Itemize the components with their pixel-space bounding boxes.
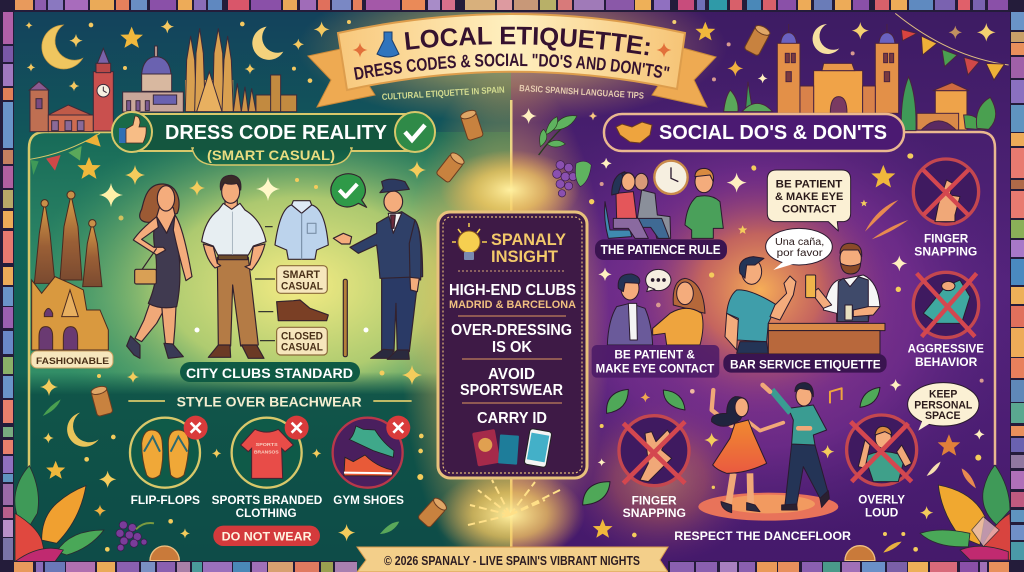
figure: man in smart casual: [202, 175, 266, 358]
bottom tiles: [14, 562, 1009, 572]
sprig: [539, 116, 577, 155]
banner: dress code reality: [112, 112, 435, 165]
prohibition: finger snapping bottom: SNAPPING: [623, 506, 686, 520]
label: be patient and make eye contact: [592, 345, 719, 378]
heading: SOCIAL DO'S & DON'TS: [659, 121, 887, 144]
connector ticks: [255, 227, 275, 341]
heading: DRESS CODE REALITY: [165, 121, 387, 144]
decorative stars: dress code panel: [40, 157, 426, 396]
item: sports branded clothing: [212, 416, 323, 520]
icon: check: [395, 112, 435, 152]
item: sports branded clothing: SPORTS: [256, 442, 278, 448]
label: smart casual: SMART: [283, 269, 320, 281]
pill: [115, 114, 433, 151]
grapes: [553, 161, 591, 197]
copper ball: [150, 546, 179, 561]
scene: bar service: [725, 170, 885, 354]
stanchion: [343, 279, 347, 357]
dancer: man: [763, 383, 829, 510]
icon: passport: [472, 429, 501, 466]
panel: dress code: [14, 110, 570, 560]
bunting: [895, 13, 1009, 80]
corner leaves: [15, 466, 104, 562]
icon: light bulb: [452, 223, 487, 260]
stars and sparks: center scene: [589, 153, 913, 307]
label: be patient and make eye contact: BE PATIENT &: [614, 347, 695, 361]
section heading: STYLE OVER BEACHWEAR: [177, 394, 362, 410]
left tiles: [3, 12, 13, 560]
insight: over-dressing: IS OK: [492, 339, 532, 356]
icon: phone: [524, 428, 552, 468]
pill: [604, 114, 904, 151]
insight: over-dressing: OVER-DRESSING: [451, 322, 572, 339]
section: style over beachwear: [15, 394, 424, 562]
insight: high-end clubs: [449, 271, 576, 316]
insight: over-dressing: [451, 322, 572, 359]
sprig and grapes: [539, 116, 591, 197]
insight heading: SPANALY: [491, 230, 567, 249]
banner ribbon tails: [308, 48, 716, 107]
figures: dress code: [127, 174, 423, 359]
insight: high-end clubs: MADRID & BARCELONA: [449, 299, 576, 311]
subtitle left: CULTURAL ETIQUETTE IN SPAIN: [382, 85, 505, 102]
prohibition: finger snapping top: [913, 159, 979, 259]
social figures: lower: [583, 379, 1012, 561]
insight: avoid sportswear: SPORTSWEAR: [460, 382, 563, 399]
bubble: be patient: [767, 170, 851, 231]
label: fashionable: [31, 351, 113, 368]
figure: doorman: [333, 179, 423, 359]
bubble: keep personal space: [908, 383, 979, 431]
landmark: brick church: [29, 82, 93, 132]
figure: woman in dress: [127, 184, 192, 358]
insight: high-end clubs: HIGH-END CLUBS: [449, 282, 576, 299]
label: respect the dancefloor: RESPECT THE DANCEFLOOR: [674, 529, 851, 543]
prohibition: finger snapping bottom: [619, 416, 689, 520]
box frame: [438, 212, 587, 478]
item: sports branded clothing: BRANSOS: [254, 449, 279, 455]
corner leaves: [920, 465, 1012, 560]
item: flip-flops: FLIP-FLOPS: [131, 493, 200, 507]
tab: smart casual: [192, 147, 352, 165]
footer ribbon: [357, 547, 668, 572]
label: bar service etiquette: BAR SERVICE ETIQUETTE: [730, 357, 881, 371]
tab: smart casual: (SMART CASUAL): [207, 147, 335, 163]
prohibition: overly loud: OVERLY: [858, 492, 905, 506]
title banner: [307, 13, 717, 108]
label: closed casual: CLOSED: [281, 330, 323, 342]
landmark: fortified tower: [256, 75, 297, 112]
grapes: [116, 521, 154, 551]
label: be patient and make eye contact: MAKE EYE CONTACT: [596, 362, 715, 376]
scene: be patient couple: [607, 269, 705, 345]
label: city clubs standard: [180, 362, 360, 382]
icon: thumbs up: [112, 112, 152, 152]
icon: blue dress: [377, 32, 399, 57]
item: sports branded clothing: SPORTS BRANDED: [212, 493, 323, 507]
bubble: be patient: BE PATIENT: [776, 178, 842, 190]
label: closed casual: CASUAL: [281, 342, 323, 354]
bunting: left panel: [30, 133, 101, 175]
title line 2: DRESS CODES & SOCIAL "DO'S AND DON'TS": [354, 54, 670, 80]
item: flip-flops: [130, 416, 208, 507]
bubble: una cana: por favor: [777, 248, 823, 259]
floor ellipse: [698, 493, 838, 521]
prohibition: finger snapping top: FINGER: [924, 232, 969, 246]
bubble: keep personal space: KEEP: [929, 388, 957, 400]
tag: do not wear: DO NOT WEAR: [222, 530, 312, 544]
leaves: [583, 387, 880, 505]
item: gym shoes: GYM SHOES: [333, 493, 404, 507]
counter: [768, 323, 885, 354]
prohibition: finger snapping bottom: FINGER: [632, 493, 677, 507]
decorative moons and stars: right top: [521, 20, 996, 170]
bubble: keep personal space: PERSONAL: [914, 399, 973, 411]
scene: the patience rule: [605, 161, 723, 238]
social figures: upper: [589, 153, 984, 378]
prohibition: aggressive behavior: BEHAVIOR: [915, 355, 978, 369]
landmark: domed building: [123, 46, 183, 112]
footer ribbon: © 2026 SPANALY - LIVE SPAIN'S VIBRANT NIGHTS: [384, 554, 640, 568]
item: gym shoes: [333, 416, 410, 507]
panel: social: [500, 80, 1020, 565]
skyline: left: [29, 28, 297, 132]
prohibition: overly loud: LOUD: [865, 506, 899, 520]
tag: do not wear: [213, 526, 320, 546]
center burst glow: [400, 65, 610, 572]
decorative moons and stars: left top: [25, 20, 351, 91]
banner body: [338, 14, 685, 90]
bubble: una cana: [766, 228, 832, 270]
label: city clubs standard: CITY CLUBS STANDARD: [186, 366, 353, 381]
icon: check bubble: [331, 174, 367, 207]
icon: music note: [830, 388, 842, 403]
skyline: right: [724, 13, 1009, 131]
landmark: Sagrada Familia: [185, 28, 256, 112]
bubble: keep personal space: SPACE: [925, 410, 961, 422]
prohibition: aggressive behavior: [908, 272, 984, 369]
stars and petals: lower right: [593, 379, 985, 553]
insight: carry id: CARRY ID: [477, 410, 547, 427]
banner star right: [656, 42, 672, 58]
cathedral: left illustration: [32, 191, 108, 350]
right tiles: [1011, 12, 1024, 560]
label: smart casual: CASUAL: [281, 280, 323, 292]
label: the patience rule: THE PATIENCE RULE: [601, 243, 721, 257]
landmark: cypress and villa: [901, 77, 969, 131]
landmark: twin tower cathedral: [777, 24, 899, 113]
insight heading: INSIGHT: [491, 247, 559, 266]
banner: social do's and don'ts: [604, 114, 904, 151]
bubble: be patient: & MAKE EYE: [775, 191, 844, 203]
prohibition: aggressive behavior: AGGRESSIVE: [908, 342, 984, 356]
copper ball right: [845, 546, 875, 561]
corks: [90, 23, 771, 528]
insight heading: [491, 230, 567, 266]
prohibition: overly loud: [847, 415, 917, 520]
icon: shirt: [275, 201, 328, 259]
scene: dance floor: [698, 383, 838, 521]
dancer: woman: [712, 390, 783, 513]
subtitle right: BASIC SPANISH LANGUAGE TIPS: [519, 83, 644, 101]
insight box: [438, 212, 587, 478]
moon and stars: [43, 399, 424, 552]
label: fashionable: FASHIONABLE: [36, 356, 109, 367]
top tiles: [15, 0, 1008, 10]
item: sports branded clothing: CLOTHING: [236, 506, 297, 520]
plants by skyline: [724, 82, 996, 130]
label: bar service etiquette: [723, 354, 887, 373]
bubble: una cana: Una caña,: [775, 237, 824, 248]
icon: ticket card: [498, 434, 519, 465]
banner star left: [352, 42, 368, 58]
icon: brown shoe: [277, 300, 328, 321]
insight: avoid sportswear: [460, 366, 563, 403]
customer: [725, 257, 796, 353]
label: closed casual: [277, 327, 327, 355]
bubble: be patient: CONTACT: [782, 204, 836, 216]
icon: handshake: [616, 122, 652, 143]
label: the patience rule: [595, 239, 727, 260]
insight: avoid sportswear: AVOID: [488, 366, 535, 383]
label: smart casual: [277, 266, 327, 293]
title line 1: LOCAL ETIQUETTE:: [404, 26, 650, 56]
landmark: clock tower: [93, 48, 113, 131]
bartender: [806, 243, 880, 322]
prohibition: finger snapping top: SNAPPING: [914, 245, 977, 259]
